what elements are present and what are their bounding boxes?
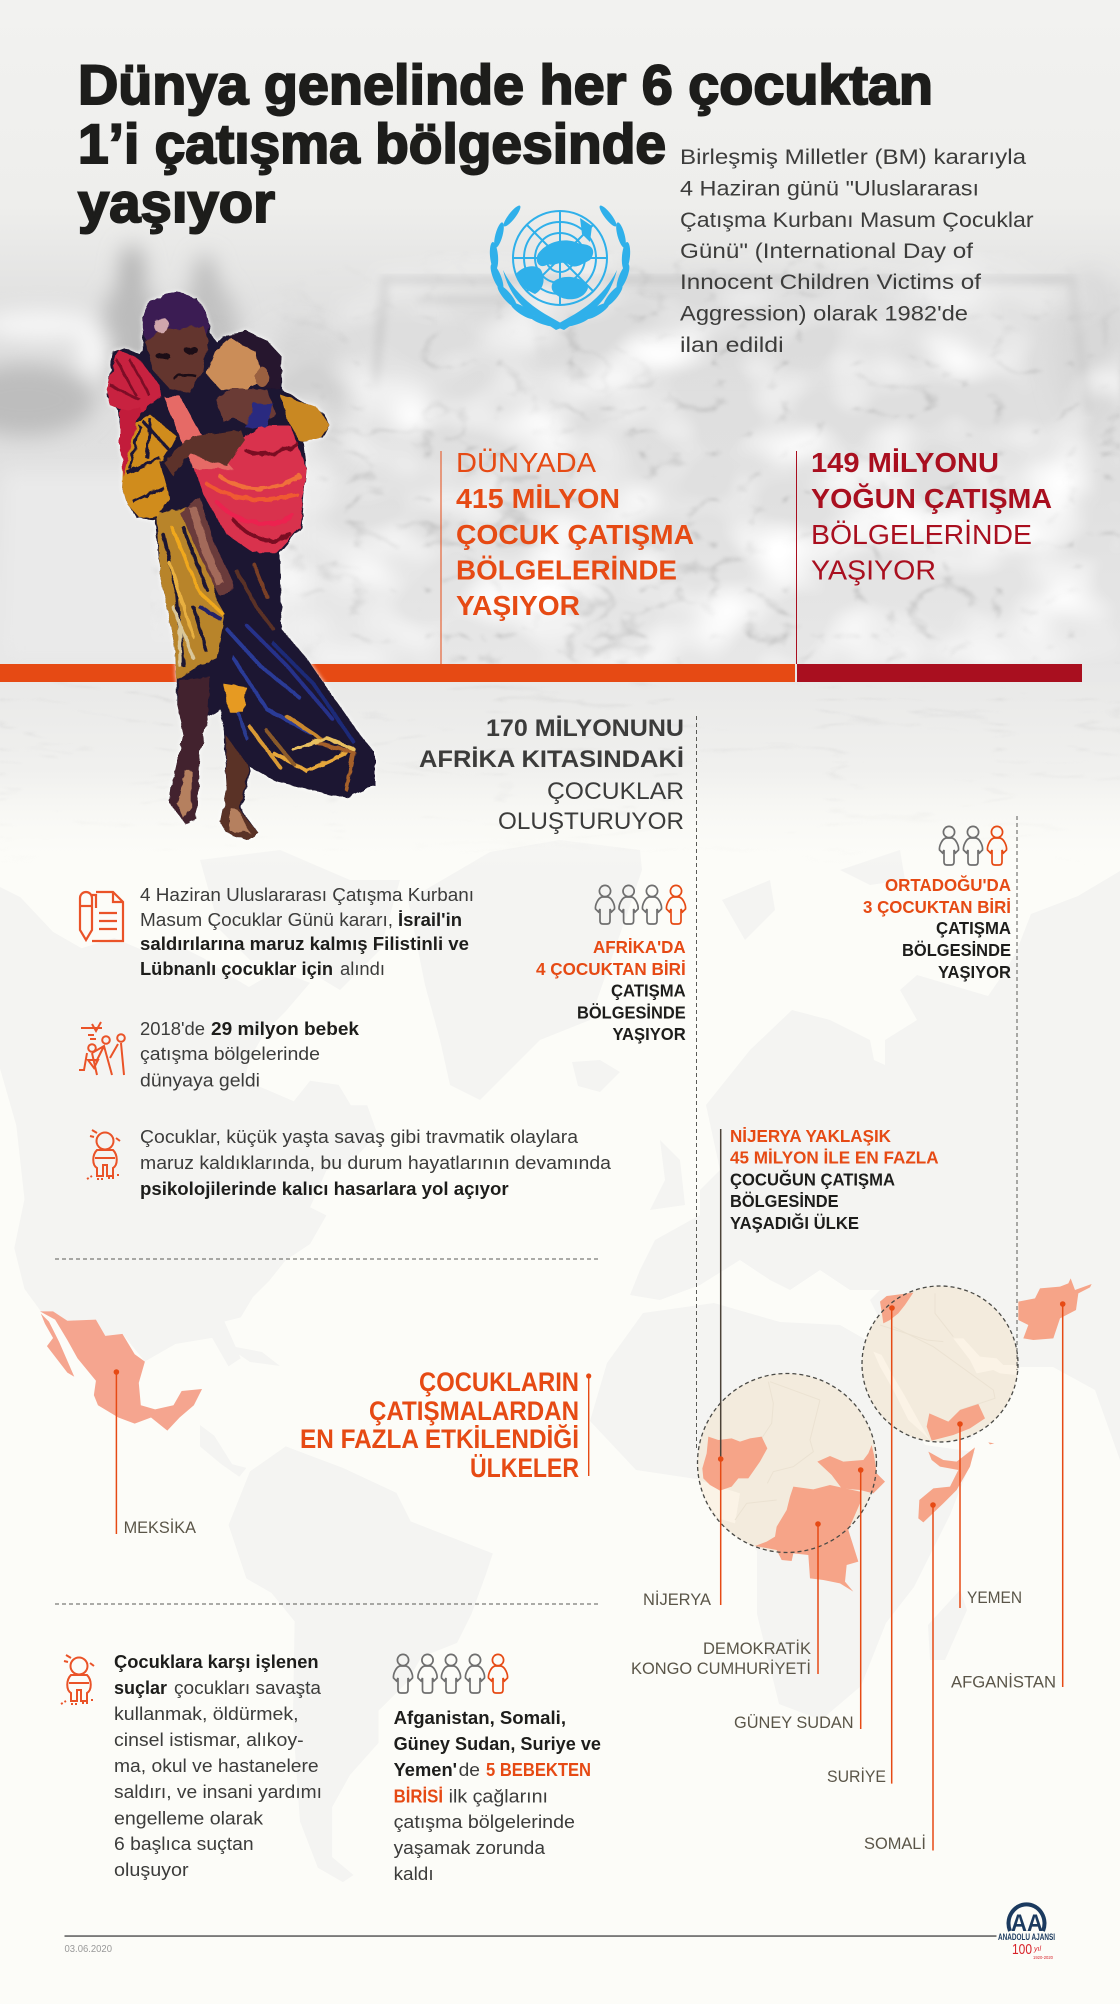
icon: four children, one highlighted [595,885,686,924]
text: one in five babies: çatışma bölgelerinde [394,1812,575,1832]
leader: DR Congo [815,1521,821,1674]
figure silhouette base [107,293,375,840]
title [78,53,933,234]
map: Novaya islands [840,850,905,885]
map: Arctic islands [200,850,400,990]
callout: 149 million: YAŞIYOR [811,554,936,586]
callout: 415 million: BÖLGELERİNDE [456,554,677,586]
text: Nigeria callout: NİJERYA YAKLAŞIK [730,1126,891,1146]
country labels: SOMALİ [864,1834,926,1853]
leader: Syria [889,1305,895,1784]
icon: United Nations emblem [488,204,632,330]
callout: 149 million [796,447,1052,664]
baby head [207,335,263,389]
intro paragraph: Aggression) olarak 1982'de [680,302,968,326]
title: yaşıyor [78,171,275,234]
dress flowing lower part [227,564,353,789]
text: one in five babies: Güney Sudan, Suriye ve [394,1734,601,1754]
leader: Mexico [114,1369,119,1534]
laurel: right branch [554,204,632,330]
dress front [157,505,225,680]
text: babies born [140,1019,360,1090]
text: one in five babies: ilk çağlarını [449,1786,548,1806]
text: decision background: Masum Çocuklar Günü kararı, [140,910,393,930]
map: North America [0,887,377,1366]
circle: Middle East [862,1286,1018,1442]
callout: 149 million: YOĞUN ÇATIŞMA [811,483,1052,514]
country: Socotra [988,1442,994,1444]
circle: Africa [698,1374,876,1552]
dashed dividers [55,716,1017,1604]
callout: 415 million: YAŞIYOR [456,590,580,621]
text: crimes against children [114,1652,322,1880]
intro paragraph: Çatışma Kurbanı Masum Çocuklar [680,209,1034,232]
heading: most affected countries: ÇATIŞMALARDAN [369,1396,579,1426]
intro paragraph: 4 Haziran günü "Uluslararası [680,178,979,200]
logo: Anadolu Ajansı [998,1904,1055,1960]
pocket [223,684,247,713]
logo: Anadolu Ajansı: 100 [1012,1941,1032,1958]
logo: Anadolu Ajansı: 1920-2020 [1033,1955,1053,1960]
country labels: GÜNEY SUDAN [734,1714,854,1732]
text: decision background: saldırılarına maruz kalmış Filistinli ve [140,934,469,954]
text: crimes against children: Çocuklara karşı işlenen [114,1652,319,1672]
text: Africa one in four: AFRİKA'DA [593,937,686,957]
country: Yemen [927,1404,985,1441]
text: babies born: çatışma bölgelerinde [140,1044,320,1064]
leader: Nigeria [718,1129,724,1605]
leader: South Sudan [858,1467,864,1729]
country labels: MEKSİKA [124,1518,196,1537]
text: psychological damage: psikolojilerinde kalıcı hasarlara yol açıyor [140,1179,509,1199]
country: Syria [880,1293,913,1323]
text: crimes against children: oluşuyor [114,1860,189,1880]
icon: family under jet [79,1022,125,1075]
text: psychological damage [140,1127,612,1199]
text: one in five babies [394,1708,601,1884]
text: one in five babies: Afganistan, Somali, [394,1708,566,1728]
text: decision background: 4 Haziran Uluslararası Çatışma Kurbanı [140,885,474,905]
text: Africa one in four: YAŞIYOR [612,1024,686,1044]
text: crimes against children: kullanmak, öldürmek, [114,1704,299,1724]
country labels: DEMOKRATİK [703,1639,811,1658]
text: psychological damage: maruz kaldıklarında, bu durum hayatlarının devamında [140,1153,612,1173]
Red Sea and Persian Gulf [699,1338,1016,1523]
map: Africa [590,1303,975,1720]
text: Middle East one in three: ÇATIŞMA [936,918,1011,938]
text: one in five babies: Yemen' [394,1760,457,1780]
orange and red bar [0,664,1082,682]
text: babies born: dünyaya geldi [140,1070,260,1090]
callout: 170 million in Africa [419,715,684,835]
country: South Sudan [817,1445,885,1493]
sling main [193,425,307,553]
red scarf [107,349,162,411]
text: psychological damage: Çocuklar, küçük yaşta savaş gibi travmatik olaylara [140,1127,579,1147]
photo background: tree texture [282,264,1120,664]
leader: Yemen [957,1421,963,1608]
map: Caribbean [225,1345,280,1366]
text: Nigeria callout: YAŞADIĞI ÜLKE [730,1212,859,1233]
text: Africa one in four: BÖLGESİNDE [577,1003,686,1023]
text: Africa one in four: 4 ÇOCUKTAN BİRİ [536,959,686,979]
callout: 170 million in Africa: AFRİKA KITASINDAKİ [419,746,684,773]
callout: 415 million: 415 MİLYON [456,483,620,514]
callout: 149 million: 149 MİLYONU [811,447,999,478]
illustration: child carrying baby [107,292,375,840]
laurel: left branch [488,204,566,330]
text: Middle East one in three: ORTADOĞU'DA [885,874,1011,895]
map: Madagascar [928,1590,967,1660]
icon: distressed child [87,1130,120,1179]
country labels: AFGANİSTAN [951,1672,1056,1692]
text: babies born: 2018'de [140,1019,205,1039]
countries highlighted [702,1278,1092,1592]
map: Eurasia [630,871,1120,1460]
text: crimes against children: engelleme olarak [114,1808,264,1828]
text: decision background [140,885,474,979]
title: Dünya genelinde her 6 çocuktan [78,53,933,116]
callout: 415 million: ÇOCUK ÇATIŞMA [456,519,694,550]
date: 03.06.2020 [64,1944,112,1955]
sling strap [163,396,233,469]
photo background: frame strokes [375,280,1088,410]
borders inside circles [735,1293,995,1520]
heading: most affected countries: ÜLKELER [470,1453,579,1483]
text: crimes against children: cinsel istismar, alıkoy- [114,1730,304,1750]
text: crimes against children: 6 başlıca suçtan [114,1834,254,1854]
text: crimes against children: çocukları savaşta [174,1678,322,1698]
map: South America [229,1446,493,1882]
text: one in five babies: kaldı [394,1864,434,1884]
text: crimes against children: saldırı, ve insani yardımı [114,1782,322,1802]
torso [122,415,177,518]
country: Afghanistan [1018,1278,1092,1340]
world map backdrop [0,840,1120,1882]
callout: 149 million: BÖLGELERİNDE [811,519,1032,550]
text: Africa one in four [536,937,686,1044]
icon: document and pen [80,892,123,941]
circle outlines [698,1286,1018,1552]
text: Nigeria callout: BÖLGESİNDE [730,1191,839,1211]
callout: 170 million in Africa: OLUŞTURUYOR [498,808,684,835]
icon: three children, one highlighted [939,826,1007,865]
leader: Afghanistan [1060,1301,1065,1687]
icon: distressed child, crimes [61,1655,94,1704]
text: one in five babies: yaşamak zorunda [394,1838,546,1858]
text: decision background: İsrail'in [398,910,462,930]
intro paragraph [680,146,1034,357]
logo: Anadolu Ajansı: ANADOLU AJANSI [998,1932,1055,1942]
baby arm far [280,395,330,442]
right leg [220,735,258,840]
country labels: SURİYE [827,1767,886,1786]
country: DR Congo [755,1485,860,1592]
heading: most affected countries: ÇOCUKLARIN [419,1367,579,1397]
text: Middle East one in three: 3 ÇOCUKTAN BİRİ [863,897,1011,917]
country: Somalia [918,1447,975,1522]
baby arm over shoulder [217,389,277,425]
text: Africa one in four: ÇATIŞMA [611,980,686,1000]
text: decision background: alındı [340,959,385,979]
older child arm and hand [163,429,245,476]
country labels: NİJERYA [643,1590,711,1609]
country labels [124,1518,1056,1853]
older child head [142,292,208,355]
text: crimes against children: suçlar [114,1678,167,1698]
photo background: texture band below the bar [0,682,1120,819]
feet highlights [177,771,250,833]
country labels: KONGO CUMHURİYETİ [631,1659,811,1678]
baby leg [180,498,233,596]
callout: 415 million: DÜNYADA [456,447,596,478]
country leader lines [114,1129,1065,1850]
footer line [64,1935,996,1937]
text: Nigeria callout: 45 MİLYON İLE EN FAZLA [730,1148,939,1168]
text: Middle East one in three: BÖLGESİNDE [902,940,1011,960]
intro paragraph: Innocent Children Victims of [680,271,981,294]
leader: Somalia [930,1502,936,1850]
callout: 170 million in Africa: 170 MİLYONUNU [486,715,684,742]
heading: most affected countries [300,1367,591,1483]
text: one in five babies: BİRİSİ [394,1786,443,1806]
map: Svalbard [722,880,775,940]
intro paragraph: Birleşmiş Milletler (BM) kararıyla [680,146,1026,169]
map: Britain [650,1140,685,1210]
map: Iceland [572,1060,620,1092]
map: Greenland [408,840,642,1100]
country: Mexico [40,1311,202,1431]
text: Nigeria callout: ÇOCUĞUN ÇATIŞMA [730,1169,895,1190]
title: 1’i çatışma bölgesinde [78,112,666,175]
text: decision background: Lübnanlı çocuklar için [140,959,333,979]
text: one in five babies: de [459,1760,480,1780]
intro paragraph: Günü" (International Day of [680,240,973,263]
heading: most affected countries: EN FAZLA ETKİLENDİĞİ [300,1424,579,1454]
map: Central America [200,1425,246,1477]
text: babies born: 29 milyon bebek [211,1019,360,1039]
sling highlights [207,444,300,541]
text: one in five babies: 5 BEBEKTEN [486,1760,591,1780]
intro paragraph: ilan edildi [680,334,784,357]
text: crimes against children: ma, okul ve hastanelere [114,1756,319,1776]
country labels: YEMEN [967,1589,1022,1607]
map circles: Africa and Middle East zoom [698,1286,1018,1552]
left leg [170,676,210,825]
icon: five babies, one highlighted [393,1654,508,1693]
text: Middle East one in three [863,874,1011,982]
text: Middle East one in three: YAŞIYOR [938,962,1011,982]
logo: Anadolu Ajansı: AA [1011,1910,1043,1937]
photo background: upper band [0,0,1120,682]
text: Nigeria callout [730,1126,939,1233]
country: Nigeria [702,1437,767,1491]
callout: 170 million in Africa: ÇOCUKLAR [547,778,684,805]
callout: 415 million [440,447,694,664]
logo: Anadolu Ajansı: yıl [1033,1946,1041,1953]
